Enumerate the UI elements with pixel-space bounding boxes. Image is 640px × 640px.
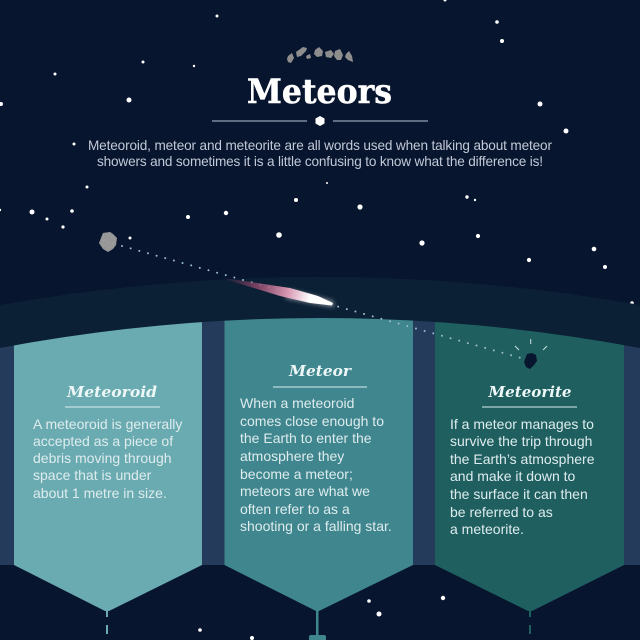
panel: meteorite background <box>435 310 624 611</box>
intro text: showers and sometimes it is a little confusing to know what the difference is! <box>97 154 543 169</box>
title ornament <box>212 116 428 126</box>
connector: meteorite dashed <box>529 611 531 634</box>
icon: row of meteoroid rocks <box>287 47 353 63</box>
meteoroid body text: space that is under <box>33 467 152 483</box>
icon: meteoroid rock <box>99 232 117 252</box>
meteorite heading: Meteorite <box>487 383 572 401</box>
meteor body text: the Earth to enter the <box>240 430 372 446</box>
meteorite body text: the surface it can then <box>450 486 588 502</box>
meteor heading <box>273 362 367 388</box>
side columns <box>0 310 640 565</box>
meteoroid body text: A meteoroid is generally <box>33 416 182 432</box>
atmosphere band <box>0 277 640 348</box>
meteoroid heading <box>65 383 160 408</box>
connector: meteoroid dashed <box>106 611 108 634</box>
meteor trajectory dots <box>122 246 521 358</box>
meteor body text <box>240 395 392 534</box>
icon: meteorite impact <box>515 339 547 369</box>
meteor with glowing trail <box>218 277 334 307</box>
meteor body text: comes close enough to <box>240 413 384 429</box>
meteorite heading <box>482 383 577 408</box>
meteoroid body text: debris moving through <box>33 450 172 466</box>
meteor body text: become a meteor; <box>240 466 353 482</box>
intro text <box>88 138 552 169</box>
meteoroid body text <box>33 416 182 501</box>
meteoroid body text: accepted as a piece of <box>33 433 173 449</box>
panel: meteoroid background <box>14 310 202 611</box>
connector: meteor stem <box>309 611 326 640</box>
meteoroid body text: about 1 metre in size. <box>33 485 167 501</box>
meteorite body text: a meteorite. <box>450 521 524 537</box>
meteor body text: When a meteoroid <box>240 395 354 411</box>
meteor body text: meteors are what we <box>240 483 370 499</box>
meteor heading: Meteor <box>288 362 352 380</box>
meteorite body text <box>450 416 595 537</box>
meteorite body text: be referred to as <box>450 504 553 520</box>
meteorite body text: If a meteor manages to <box>450 416 594 432</box>
meteoroid heading: Meteoroid <box>66 383 158 401</box>
meteorite body text: the Earth’s atmosphere <box>450 451 595 467</box>
meteor body text: often refer to as a <box>240 501 350 517</box>
intro text: Meteoroid, meteor and meteorite are all words used when talking about meteor <box>88 138 552 153</box>
meteorite body text: and make it down to <box>450 468 576 484</box>
panel: meteor background <box>224 310 413 611</box>
title: Meteors <box>247 72 392 112</box>
meteorite body text: survive the trip through <box>450 433 592 449</box>
meteor body text: shooting or a falling star. <box>240 518 392 534</box>
meteor body text: atmosphere they <box>240 448 344 464</box>
